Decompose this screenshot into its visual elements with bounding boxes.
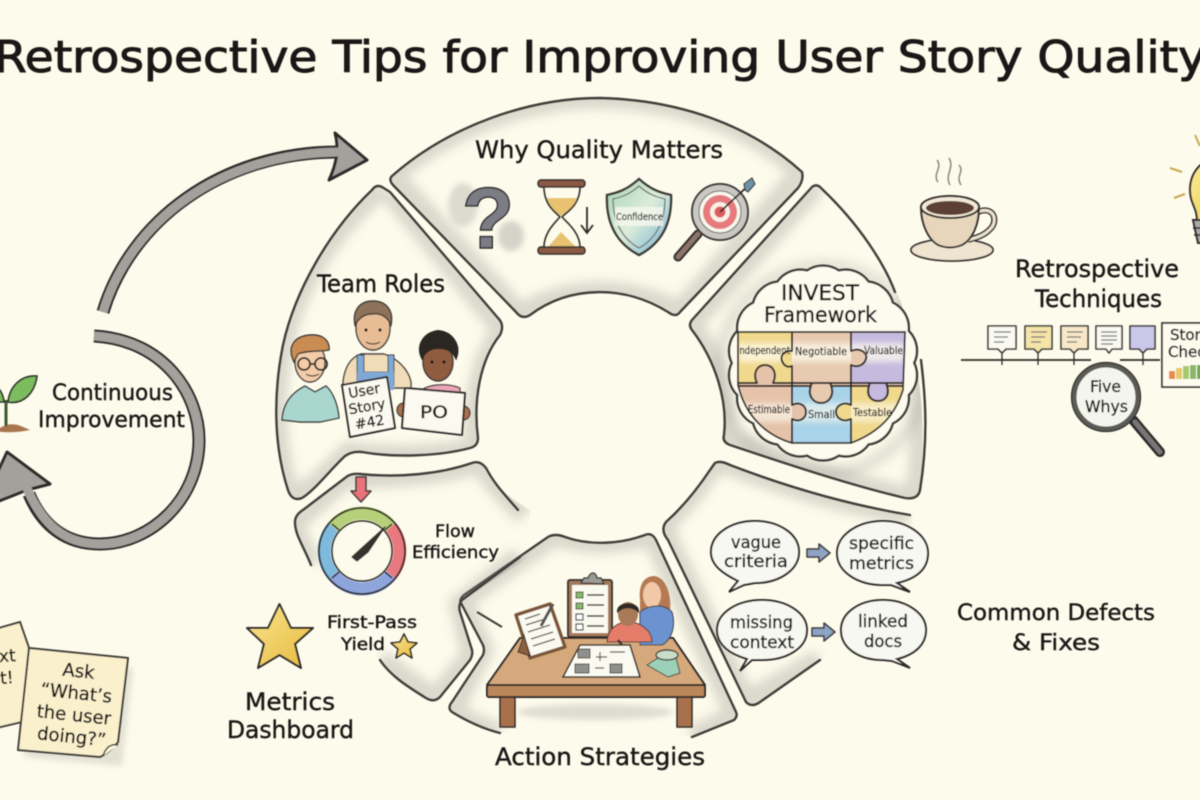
title: Retrospective Tips for Improving User Story Quality — [0, 32, 1200, 83]
labels: INVEST words: Testable — [852, 407, 892, 419]
panel: action strategies — [450, 534, 737, 737]
bubble: specific metrics: metrics — [849, 554, 914, 574]
puzzle: INVEST pieces — [737, 332, 905, 445]
panel: team roles — [276, 186, 503, 499]
icon: five whys magnifier: Five — [1090, 377, 1121, 396]
heading: common defects and fixes: & Fixes — [1012, 631, 1100, 656]
panel: metrics dashboard — [295, 462, 525, 700]
card: story check — [1162, 323, 1200, 387]
label: first-pass yield: First-Pass — [327, 613, 417, 633]
icon: confidence shield: Confidence — [616, 212, 663, 223]
label: first-pass yield: Yield — [340, 635, 385, 655]
heading: team roles: Team Roles — [316, 270, 445, 298]
paper diagram — [563, 645, 640, 677]
bubble: missing context — [717, 600, 807, 671]
bubble: specific metrics — [837, 521, 928, 592]
clipboard — [568, 573, 612, 637]
card: PO held in hands — [397, 388, 470, 435]
icon: five whys magnifier — [1072, 362, 1160, 452]
labels: INVEST words: Small — [808, 409, 835, 421]
icon: five whys magnifier: Whys — [1085, 397, 1128, 416]
card: User Story #42: Story — [347, 396, 387, 418]
icon: question mark with smudge — [448, 171, 524, 267]
arrow: missing to linked — [812, 623, 835, 641]
heading: Continuous Improvement: Improvement — [38, 408, 185, 433]
card 1 — [988, 326, 1016, 353]
icon: hourglass — [538, 180, 593, 254]
chart: flow efficiency gauge — [319, 508, 405, 594]
bubble: vague criteria — [711, 521, 799, 592]
card 3 — [1061, 326, 1088, 353]
sticky note: Ask What's the user doing: the user — [36, 701, 113, 730]
arrow: lower continuous-improvement arrow — [0, 336, 199, 544]
bubble: missing context: missing — [730, 613, 793, 633]
illustration: desk scene — [487, 573, 705, 727]
person: glasses — [282, 335, 339, 422]
labels: INVEST words: Negotiable — [795, 346, 847, 358]
label: flow efficiency: Flow — [435, 522, 475, 542]
icon: question mark with smudge: ? — [462, 171, 514, 267]
sticky note: partial note — [0, 622, 29, 729]
icon: confidence shield — [607, 179, 671, 255]
heading: metrics dashboard: Metrics — [245, 688, 335, 716]
heading: common defects and fixes — [957, 601, 1155, 656]
bubble: linked docs — [841, 600, 926, 668]
labels: INVEST words: Valuable — [864, 345, 903, 357]
heading: common defects and fixes: Common Defects — [957, 601, 1155, 626]
icon: large star — [247, 604, 313, 668]
bubble: vague criteria: criteria — [724, 552, 788, 572]
people — [607, 576, 674, 650]
heading: retrospective techniques: Techniques — [1034, 285, 1162, 313]
arrow: vague to specific — [807, 544, 830, 562]
bubble: linked docs: docs — [864, 632, 902, 652]
label: first-pass yield — [327, 613, 417, 655]
sticky note: Ask What's the user doing — [18, 648, 133, 766]
person: overalls — [343, 301, 411, 390]
badge: scalloped INVEST circle — [729, 266, 917, 460]
tablet with pen — [516, 604, 565, 658]
bubble: linked docs: linked — [858, 612, 908, 632]
sticky note: Ask What's the user doing: doing?” — [36, 723, 107, 751]
heading: action strategies: Action Strategies — [495, 743, 705, 771]
labels: INVEST words — [737, 345, 903, 421]
card 4 — [1096, 326, 1122, 353]
card: User Story #42 — [342, 377, 395, 437]
heading: metrics dashboard: Dashboard — [227, 716, 354, 744]
heading: Continuous Improvement — [38, 381, 185, 433]
panel: why quality matters — [390, 98, 802, 317]
card: User Story #42: User — [347, 381, 382, 402]
person: curly hair — [420, 331, 460, 396]
labels: INVEST words: Estimable — [748, 404, 790, 416]
card: PO held in hands: PO — [420, 403, 448, 423]
heading: retrospective techniques — [1015, 255, 1179, 313]
sticky note: Ask What's the user doing: “What’s — [39, 679, 113, 708]
panel: INVEST framework — [690, 185, 927, 498]
icon: seedling — [0, 376, 37, 432]
sticky note: Ask What's the user doing: Ask — [61, 660, 96, 684]
heading: INVEST Framework — [764, 281, 878, 327]
bubble: vague criteria: vague — [731, 533, 781, 553]
labels: INVEST words: Independent — [737, 345, 790, 357]
label: flow efficiency: Efficiency — [412, 543, 499, 563]
heading: why quality matters: Why Quality Matters — [475, 136, 723, 164]
arrow: upper continuous-improvement arrow — [103, 133, 367, 312]
heading: INVEST Framework: INVEST — [781, 281, 859, 305]
icon: red down arrow — [351, 477, 371, 502]
bubble: specific metrics: specific — [849, 534, 914, 554]
card 5 — [1130, 326, 1155, 353]
heading: INVEST Framework: Framework — [764, 303, 878, 327]
bubble: missing context: context — [730, 633, 794, 653]
desk — [487, 638, 705, 727]
icon: small star — [391, 634, 417, 658]
icon: coffee cup — [911, 158, 994, 261]
card 2 — [1025, 326, 1052, 353]
heading: retrospective techniques: Retrospective — [1015, 255, 1179, 283]
heading: Continuous Improvement: Continuous — [52, 381, 173, 406]
heading: metrics dashboard — [227, 688, 354, 744]
label: flow efficiency — [412, 522, 499, 563]
timeline with retrospective cards — [961, 326, 1160, 365]
icon: light bulb — [1170, 135, 1200, 243]
jar with cloth — [647, 650, 680, 677]
icon: target in magnifier — [678, 178, 755, 257]
card: User Story #42: #42 — [354, 412, 386, 433]
panel: common defects and fixes — [663, 462, 928, 705]
